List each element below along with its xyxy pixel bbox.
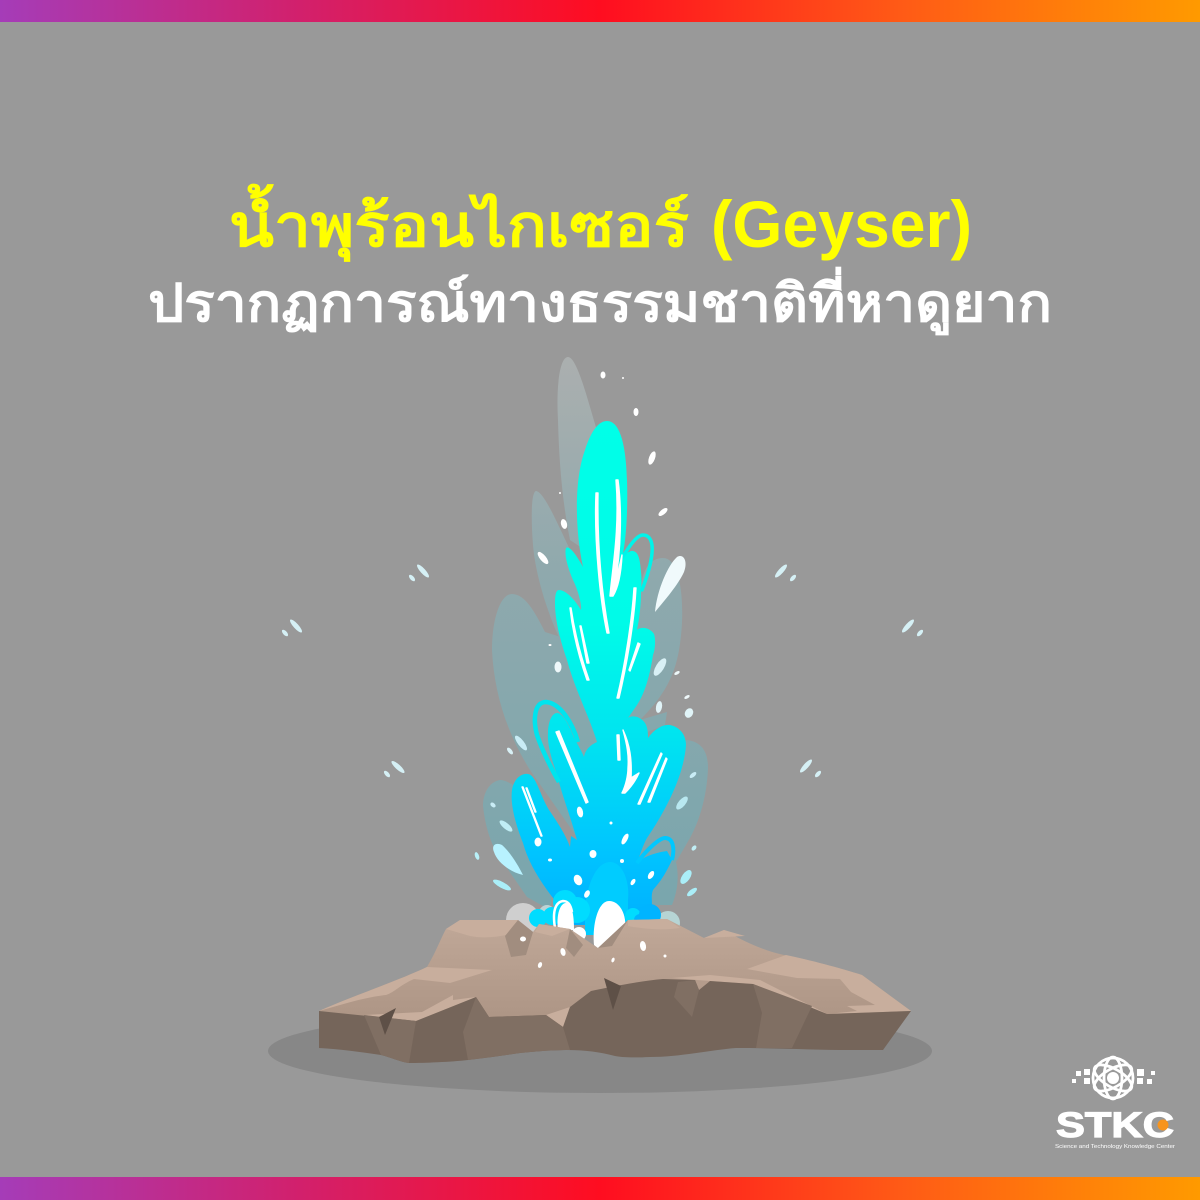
rock top surface (319, 919, 911, 1030)
white foam (557, 901, 625, 950)
foam ring (554, 901, 572, 928)
pale droplets (474, 656, 698, 898)
rock (319, 919, 911, 1063)
large drop left (493, 844, 523, 875)
ground shadow (268, 1009, 932, 1093)
main water column (512, 421, 686, 925)
title: (Geyser) (711, 187, 972, 261)
rock front face (319, 979, 911, 1063)
logo caption: Science and Technology Knowledge Center (1055, 1144, 1175, 1150)
rock facets (505, 920, 628, 957)
white droplets in water (534, 806, 656, 899)
title (229, 184, 972, 263)
rock cracks (379, 978, 621, 1035)
rock light patches (319, 919, 911, 1027)
droplets on rock (520, 936, 666, 969)
stones behind water (506, 903, 540, 937)
rock front lighter facets (364, 980, 812, 1063)
logo pixel squares (1072, 1069, 1155, 1084)
top gradient bar (0, 0, 1200, 22)
side sparkles (281, 563, 924, 778)
logo (1055, 1057, 1175, 1150)
white highlights on water (522, 480, 667, 836)
title: น้ำพุร้อนไกเซอร์ (229, 184, 689, 263)
base dome water (585, 862, 628, 935)
base bubbles (529, 890, 641, 927)
droplets around the plume (536, 372, 669, 646)
logo atom emblem (1090, 1057, 1136, 1099)
geyser illustration (474, 357, 708, 950)
logo wordmark: STKC (1056, 1106, 1174, 1145)
ghost water spray behind (483, 357, 708, 910)
swirl strokes (622, 535, 652, 590)
subtitle: ปรากฏการณ์ทางธรรมชาติที่หาดูยาก (148, 267, 1052, 336)
logo orange dot (1158, 1120, 1168, 1130)
bottom gradient bar (0, 1177, 1200, 1200)
large drop right (655, 556, 686, 612)
